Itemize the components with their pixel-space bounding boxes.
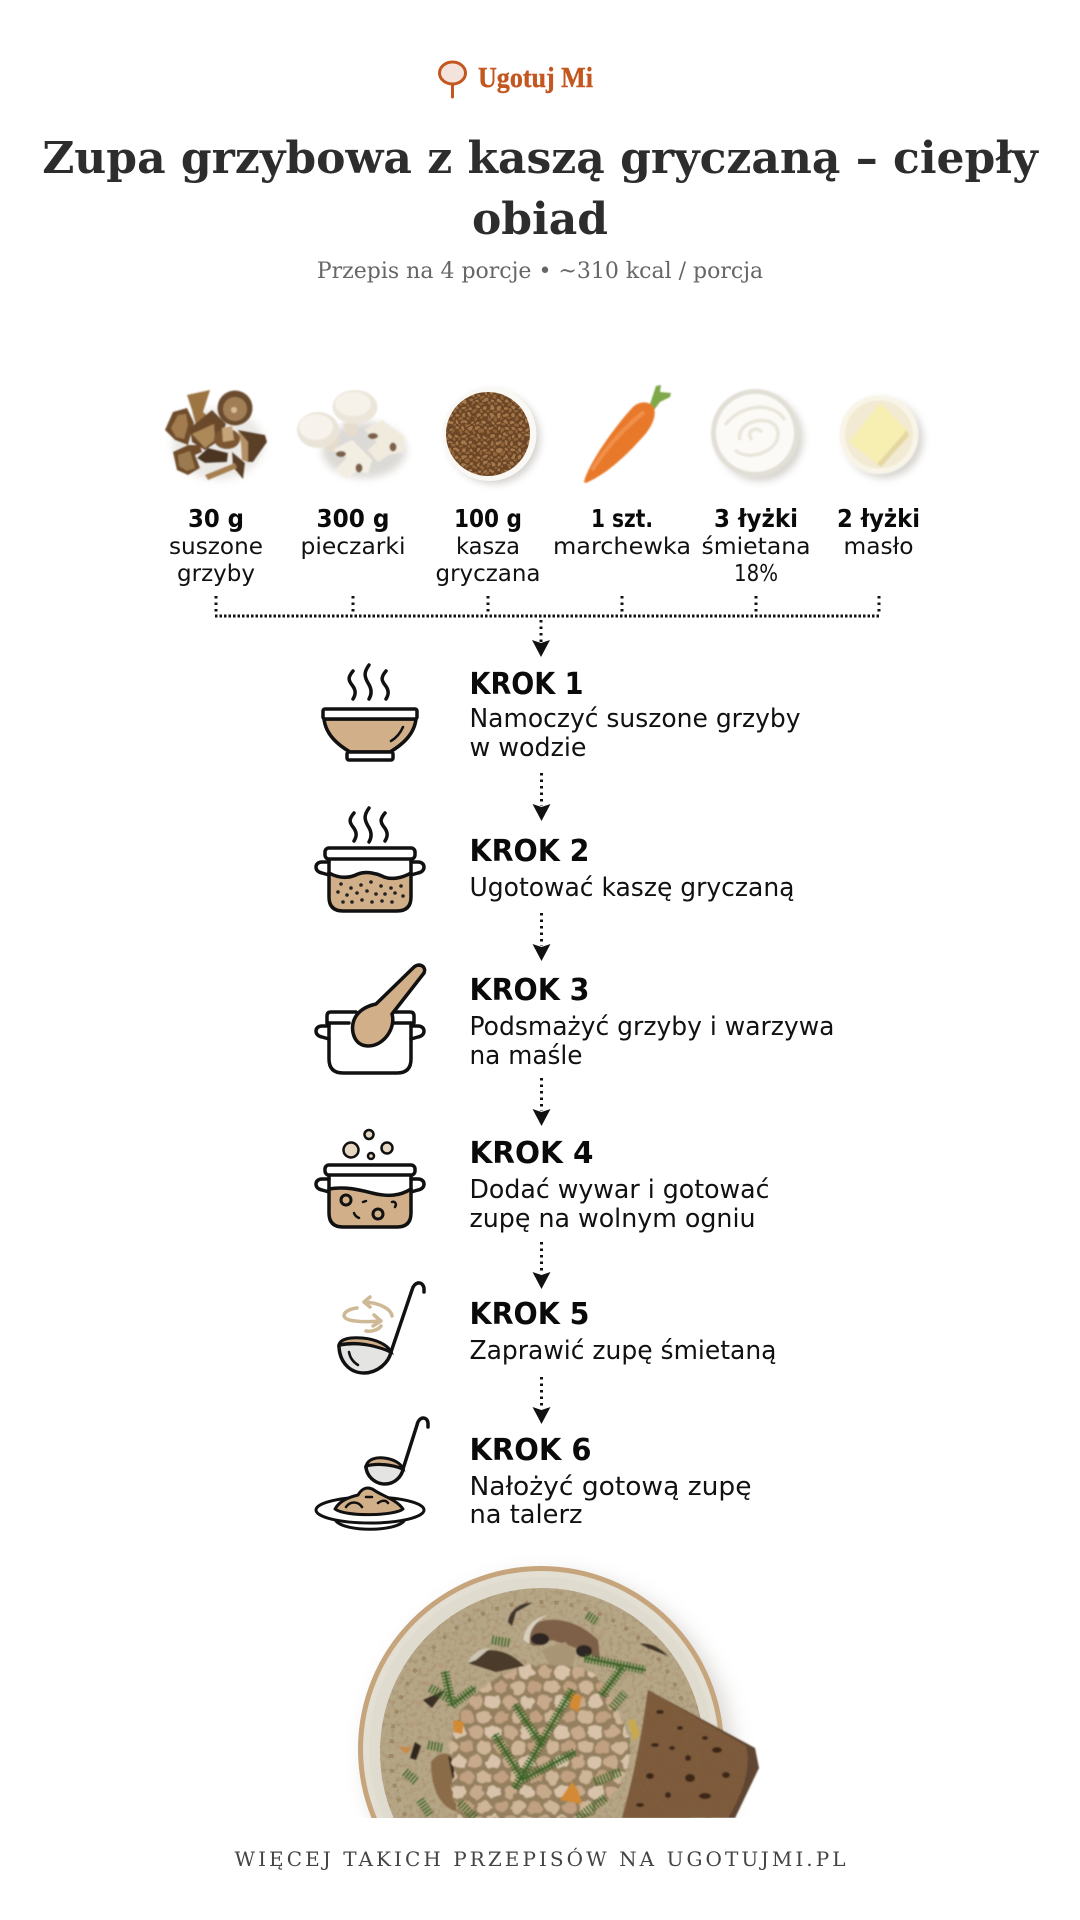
step 6 text: Nałożyć gotową zupę (470, 1472, 752, 1502)
dill (405, 1615, 645, 1818)
ingredient: buckwheat label (436, 504, 540, 587)
step 5 (339, 1283, 776, 1373)
step 1 text: w wodzie (470, 733, 586, 763)
logo (440, 62, 593, 97)
step 6 (316, 1418, 752, 1530)
icon: carrot (584, 385, 671, 483)
ingredient: dried mushrooms label (169, 504, 263, 587)
step 5 text (470, 1297, 776, 1366)
step 6 text: KROK 6 (470, 1433, 592, 1468)
arrow: step 2 to 3 (532, 913, 550, 961)
ingredient: sour cream label: śmietana (702, 534, 810, 560)
step 4 text: zupę na wolnym ogniu (470, 1204, 756, 1234)
step 1 text: KROK 1 (470, 667, 584, 702)
footer: WIĘCEJ TAKICH PRZEPISÓW NA UGOTUJMI.PL (234, 1846, 846, 1871)
step 1 text (470, 667, 800, 763)
step 3 text: KROK 3 (470, 973, 590, 1008)
logo text: Ugotuj Mi (478, 62, 593, 94)
step 3 text: na maśle (470, 1041, 582, 1071)
ingredient: carrot label: 1 szt. (591, 504, 653, 533)
connector: ingredients to steps (215, 596, 881, 657)
icon: spoon logo (440, 62, 466, 97)
carrot pieces (398, 1692, 640, 1804)
ingredient: dried mushrooms label: 30 g (188, 504, 244, 533)
ingredient: mushrooms label: pieczarki (300, 534, 406, 560)
step 5 text: KROK 5 (470, 1297, 590, 1332)
step 3 (316, 965, 834, 1073)
icon: ladle over plate (316, 1418, 428, 1529)
ingredient: buckwheat label: kasza (456, 534, 520, 560)
ingredient: sour cream label (702, 504, 810, 587)
icon: simmering pot with bubbles (316, 1130, 424, 1227)
step 3 text (470, 973, 834, 1071)
step 4 (316, 1130, 770, 1234)
step 5 text: Zaprawić zupę śmietaną (470, 1336, 776, 1366)
icon: buckwheat bowl (440, 386, 540, 484)
ingredient: carrot label (553, 504, 691, 560)
icon: dried mushrooms (165, 390, 267, 480)
mushroom slices (410, 1603, 668, 1812)
step 4 text: Dodać wywar i gotować (470, 1175, 770, 1205)
icon: pot with wooden spoon (316, 965, 425, 1073)
ingredient: sour cream label: 18% (734, 561, 778, 587)
ingredient: mushrooms label: 300 g (316, 504, 390, 533)
ingredient: butter label (837, 504, 920, 560)
icon: button mushrooms (297, 390, 406, 479)
subtitle: Przepis na 4 porcje • ~310 kcal / porcja (317, 259, 763, 284)
step 3 text: Podsmażyć grzyby i warzywa (470, 1012, 834, 1042)
ingredient: buckwheat label: gryczana (436, 561, 540, 587)
icon: ladle with cream swirl (339, 1283, 424, 1373)
ingredient: buckwheat label: 100 g (454, 504, 522, 533)
ingredient: butter label: masło (844, 534, 914, 560)
arrow: step 5 to 6 (532, 1377, 550, 1424)
slice of rye bread (622, 1690, 759, 1818)
ingredient: sour cream label: 3 łyżki (714, 504, 798, 533)
ingredient: dried mushrooms label: grzyby (177, 561, 255, 587)
step 6 text: na talerz (470, 1500, 582, 1530)
ingredient: dried mushrooms label: suszone (169, 534, 263, 560)
icon: pot with buckwheat (316, 808, 424, 911)
title: Zupa grzybowa z kaszą gryczaną – ciepły (42, 133, 1039, 184)
ingredient: carrot label: marchewka (553, 534, 691, 560)
icon: bowl with steam (323, 665, 417, 760)
arrow: step 1 to 2 (532, 773, 550, 821)
arrow: step 4 to 5 (532, 1242, 550, 1289)
step 1 text: Namoczyć suszone grzyby (470, 704, 800, 734)
step 1 (323, 665, 800, 763)
panel: ingredients (165, 385, 923, 587)
photo: mushroom soup with bread (358, 1566, 760, 1818)
step 2 text: Ugotować kaszę gryczaną (470, 873, 794, 903)
step 6 text (470, 1433, 752, 1530)
arrow: step 3 to 4 (532, 1078, 550, 1126)
title: obiad (472, 194, 608, 245)
buckwheat mound (450, 1665, 630, 1818)
soup bowl (358, 1566, 723, 1818)
step 2 text (470, 834, 794, 903)
step 2 text: KROK 2 (470, 834, 590, 869)
ingredient: mushrooms label (300, 504, 406, 560)
icon: sour cream bowl (711, 389, 803, 481)
ingredient: butter label: 2 łyżki (837, 504, 920, 533)
icon: butter dish (840, 395, 923, 478)
step 4 text: KROK 4 (470, 1136, 594, 1171)
step 2 (316, 808, 794, 911)
step 4 text (470, 1136, 770, 1234)
